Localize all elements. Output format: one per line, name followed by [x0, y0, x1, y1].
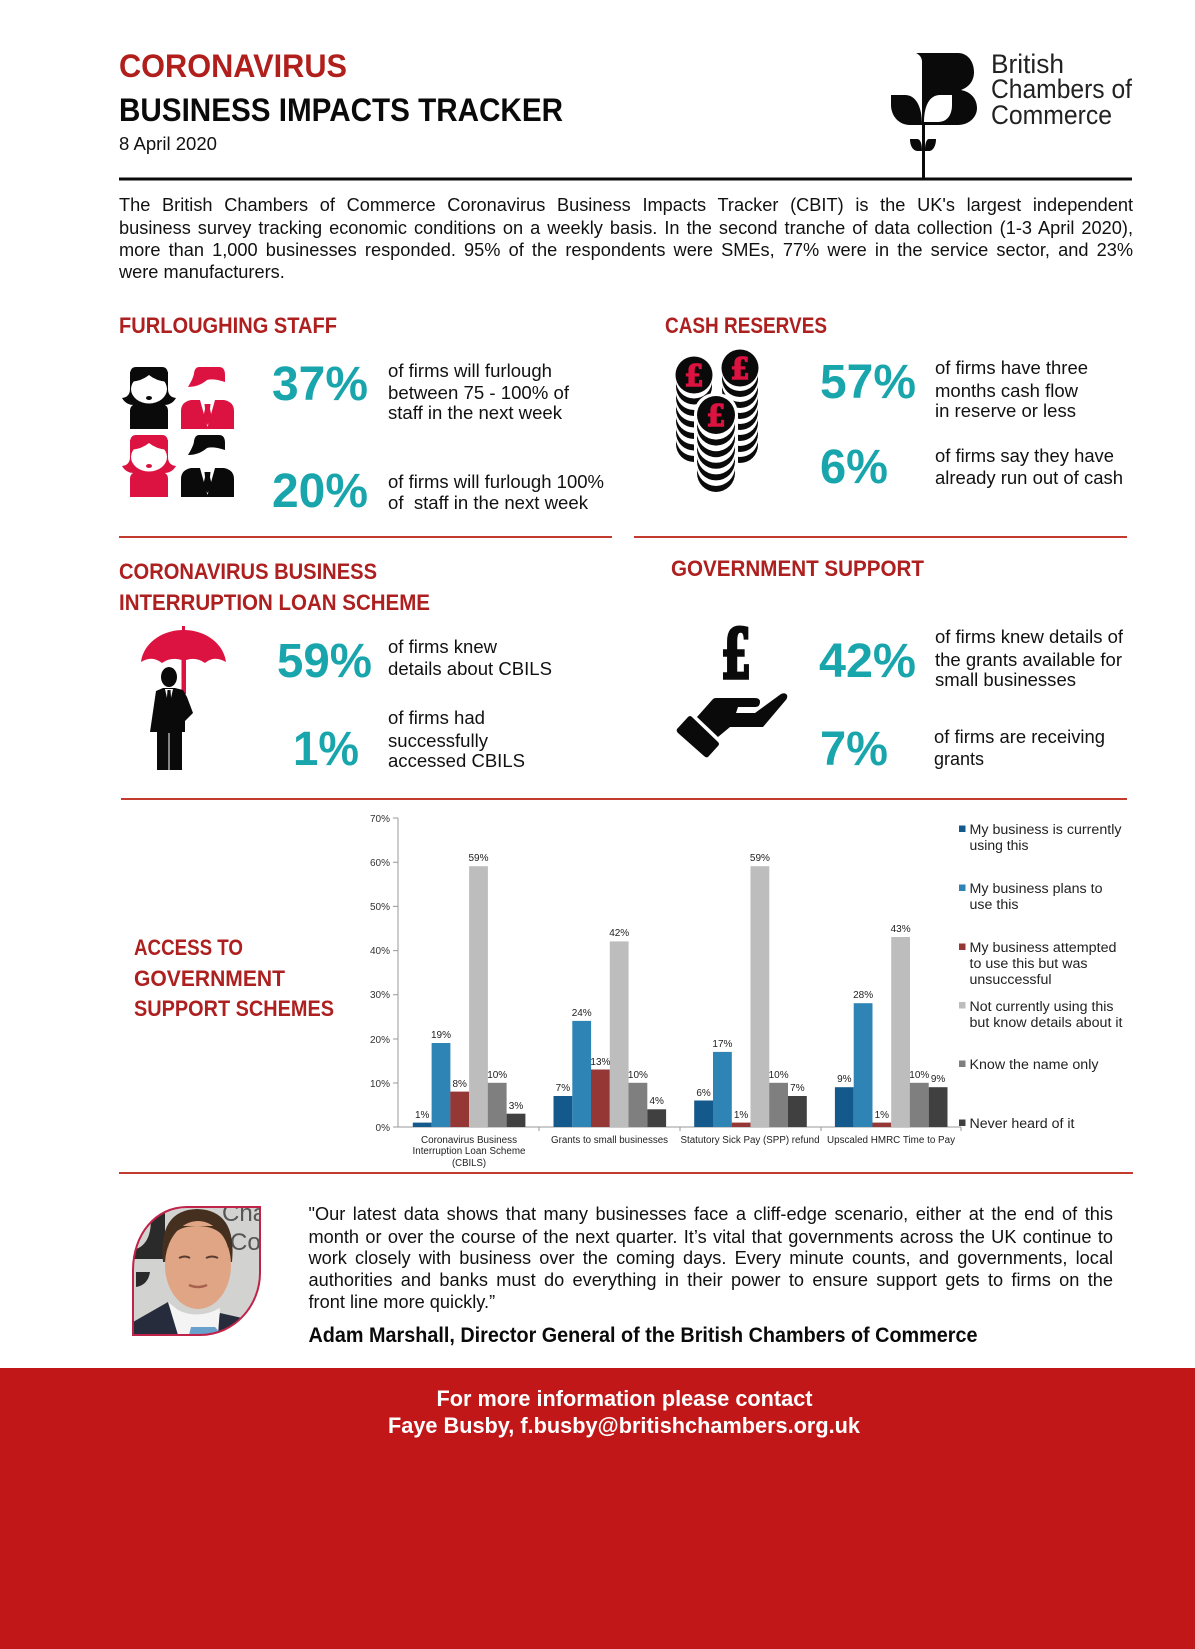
text: 7% description: grants: [934, 749, 984, 769]
text: 42% description: the grants available for: [935, 650, 1122, 670]
icon: pound sign above open hand: £: [721, 615, 751, 695]
text: 57% description: months cash flow: [935, 381, 1079, 401]
y axis: 0%: [376, 1123, 390, 1134]
bars: Statutory Sick Pay refund: 1%: [734, 1110, 748, 1121]
legend: Never heard of it: [970, 1116, 1075, 1131]
text: 59% description: [388, 637, 552, 679]
bars: Coronavirus Business Interruption Loan Scheme: 3%: [509, 1101, 523, 1112]
bar chart: [370, 814, 961, 1169]
heading: access to government support schemes: ACCESS TO: [134, 935, 243, 960]
heading: access to government support schemes: [134, 935, 334, 1021]
icon: pound sign above open hand: [677, 615, 787, 757]
stat: 7%: 7%: [820, 723, 888, 776]
heading: access to government support schemes: SUPPORT SCHEMES: [134, 996, 334, 1021]
stat: 37%: 37%: [272, 358, 368, 411]
y axis: 40%: [370, 946, 390, 957]
contact line: For more information please contact: [436, 1386, 813, 1411]
legend: use this: [970, 897, 1019, 912]
icon: coin stacks: £: [706, 399, 726, 434]
bars: Coronavirus Business Interruption Loan Scheme: 19%: [431, 1030, 451, 1041]
logo: British Chambers of Commerce: [891, 49, 1132, 179]
stat: 42%: 42%: [819, 635, 916, 688]
heading: furloughing staff: FURLOUGHING STAFF: [119, 313, 337, 338]
stat: 57%: 57%: [820, 356, 916, 409]
panel: access to government support schemes: [134, 814, 1123, 1169]
intro text: [119, 195, 1133, 282]
text: 1% description: of firms had: [388, 708, 485, 728]
title: coronavirus: CORONAVIRUS: [119, 48, 347, 84]
x axis: Interruption Loan Scheme: [412, 1146, 526, 1157]
text: 6% description: already run out of cash: [935, 468, 1123, 488]
bars: Grants to small businesses: 4%: [649, 1096, 664, 1107]
quote text: "Our latest data shows that many businesses face a cliff-edge scenario, either at the end of this: [308, 1204, 1113, 1224]
legend: Not currently using this: [970, 999, 1114, 1014]
bars: Grants to small businesses: 7%: [556, 1083, 570, 1094]
y axis: 30%: [370, 990, 390, 1001]
footer band: [0, 1368, 1195, 1649]
x axis: (CBILS): [452, 1158, 486, 1169]
intro text: more than 1,000 businesses responded. 95% of the respondents were SMEs, 77% were in the service sector, and 23%: [119, 240, 1133, 260]
panel: cash reserves: [665, 313, 1123, 495]
legend: [959, 822, 1123, 1131]
logo: British Chambers of Commerce: Commerce: [991, 100, 1112, 130]
text: 6% description: of firms say they have: [935, 446, 1114, 466]
bars: Upscaled HMRC Time to Pay: 9%: [837, 1074, 852, 1085]
bars: Upscaled HMRC Time to Pay: 28%: [853, 990, 873, 1001]
panel: furloughing staff: [119, 313, 604, 518]
text: 7% description: [934, 727, 1105, 769]
portrait: Adam Marshall: [133, 1200, 269, 1335]
portrait: Adam Marshall: Cor: [230, 1229, 269, 1256]
bars: Coronavirus Business Interruption Loan Scheme: 59%: [468, 853, 489, 864]
bars: Statutory Sick Pay refund: 10%: [769, 1070, 789, 1081]
y axis: [370, 814, 398, 1134]
bars: Upscaled HMRC Time to Pay: 1%: [875, 1110, 889, 1121]
bars: Statutory Sick Pay refund: 7%: [790, 1083, 805, 1094]
text: 59% description: of firms knew: [388, 637, 498, 657]
intro text: were manufacturers.: [119, 262, 285, 282]
bars: Upscaled HMRC Time to Pay: 9%: [931, 1074, 945, 1085]
quote text: month or over the course of the next quarter. It’s vital that governments across the UK continue to: [308, 1227, 1113, 1247]
heading: CBILS: CORONAVIRUS BUSINESS: [119, 559, 377, 584]
bars: Statutory Sick Pay refund: 6%: [696, 1088, 711, 1099]
bars: Grants to small businesses: [554, 928, 666, 1127]
stat: 6%: 6%: [820, 441, 888, 494]
heading: CBILS: [119, 559, 430, 615]
bars: Statutory Sick Pay refund: [694, 853, 807, 1127]
text: 37% description: staff in the next week: [388, 403, 563, 423]
legend: My business is currently: [970, 822, 1122, 837]
bars: Coronavirus Business Interruption Loan Scheme: 8%: [452, 1079, 467, 1090]
text: 1% description: [388, 708, 525, 771]
date: 8 April 2020: [119, 134, 217, 154]
logo: British Chambers of Commerce: British: [991, 49, 1064, 79]
icon: coin stacks: £: [684, 359, 704, 394]
text: 37% description: [388, 361, 570, 423]
y axis: 50%: [370, 902, 390, 913]
text: 37% description: of firms will furlough: [388, 361, 552, 381]
intro text: The British Chambers of Commerce Coronavirus Business Impacts Tracker (CBIT) is the UK's largest independent: [119, 195, 1133, 215]
bars: Upscaled HMRC Time to Pay: 43%: [891, 924, 911, 935]
icon: group of four people: [122, 367, 234, 497]
bars: Grants to small businesses: 10%: [628, 1070, 648, 1081]
y axis: 10%: [370, 1079, 390, 1090]
title: business impacts tracker: BUSINESS IMPACTS TRACKER: [119, 92, 563, 128]
heading: access to government support schemes: GOVERNMENT: [134, 966, 286, 991]
icon: coin stacks: £: [730, 352, 750, 387]
heading: cash reserves: CASH RESERVES: [665, 313, 827, 338]
text: 20% description: of firms will furlough 100%: [388, 472, 604, 492]
portrait: Adam Marshall: Cha: [222, 1200, 267, 1227]
quote text: authorities and banks must do everything in their power to ensure support gets to firms on the: [308, 1270, 1113, 1290]
bars: Coronavirus Business Interruption Loan Scheme: 1%: [415, 1110, 430, 1121]
legend: My business plans to: [970, 881, 1102, 896]
x axis: Grants to small businesses: [551, 1135, 668, 1146]
bars: Statutory Sick Pay refund: 59%: [750, 853, 770, 864]
stat: 59%: 59%: [277, 635, 372, 688]
text: 42% description: [935, 627, 1124, 690]
bars: Coronavirus Business Interruption Loan Scheme: [413, 853, 525, 1127]
legend: but know details about it: [970, 1015, 1123, 1030]
x axis: Coronavirus Business: [421, 1135, 517, 1146]
stat: 1%: 1%: [293, 723, 359, 776]
text: 20% description: of staff in the next week: [388, 493, 589, 513]
panel: coronavirus business interruption loan scheme: [119, 559, 552, 776]
legend: My business attempted: [970, 940, 1116, 955]
bars: Grants to small businesses: 42%: [609, 928, 629, 939]
text: 57% description: [935, 358, 1088, 421]
x axis: Statutory Sick Pay (SPP) refund: [680, 1135, 820, 1146]
text: 6% description: [935, 446, 1123, 488]
legend: using this: [970, 838, 1029, 853]
text: 59% description: details about CBILS: [388, 659, 552, 679]
contact name and email: Faye Busby, f.busby@britishchambers.org.uk: [388, 1413, 861, 1438]
y axis: 20%: [370, 1035, 390, 1046]
quote text: work closely with business over the coming days. Every minute counts, and governments, local: [308, 1248, 1113, 1268]
legend: to use this but was: [970, 956, 1088, 971]
text: 1% description: accessed CBILS: [388, 751, 525, 771]
y axis: 60%: [370, 858, 390, 869]
x axis: [398, 1127, 961, 1169]
text: 1% description: successfully: [388, 731, 489, 751]
bars: Upscaled HMRC Time to Pay: [835, 924, 948, 1127]
logo: British Chambers of Commerce: Chambers of: [991, 74, 1132, 104]
legend: unsuccessful: [970, 972, 1052, 987]
quote text: [308, 1204, 1113, 1312]
attribution: Adam Marshall, Director General of the British Chambers of Commerce: [308, 1324, 978, 1347]
heading: CBILS: INTERRUPTION LOAN SCHEME: [119, 590, 430, 615]
bars: Upscaled HMRC Time to Pay: 10%: [909, 1070, 929, 1081]
bars: Grants to small businesses: 24%: [572, 1008, 592, 1019]
header: [119, 48, 563, 154]
quote text: front line more quickly.”: [308, 1292, 495, 1312]
text: 42% description: of firms knew details of: [935, 627, 1124, 647]
bars: Coronavirus Business Interruption Loan Scheme: 10%: [487, 1070, 507, 1081]
bars: Statutory Sick Pay refund: 17%: [712, 1039, 733, 1050]
text: 20% description: [388, 472, 604, 513]
panel: government support: [671, 556, 1124, 776]
legend: Know the name only: [970, 1057, 1099, 1072]
y axis: 70%: [370, 814, 390, 825]
text: 37% description: between 75 - 100% of: [388, 383, 570, 403]
icon: businessman under umbrella: [141, 626, 226, 770]
icon: coin stacks: [676, 350, 758, 495]
heading: government support: GOVERNMENT SUPPORT: [671, 556, 925, 581]
text: 7% description: of firms are receiving: [934, 727, 1105, 747]
text: 42% description: small businesses: [935, 670, 1076, 690]
text: 57% description: in reserve or less: [935, 401, 1076, 421]
stat: 20%: 20%: [272, 465, 368, 518]
x axis: Upscaled HMRC Time to Pay: [827, 1135, 955, 1146]
intro text: business survey tracking economic conditions on a weekly basis. In the second tranche of data collection (1-3 April 2020),: [119, 218, 1133, 238]
text: 57% description: of firms have three: [935, 358, 1088, 378]
bars: Grants to small businesses: 13%: [590, 1057, 611, 1068]
